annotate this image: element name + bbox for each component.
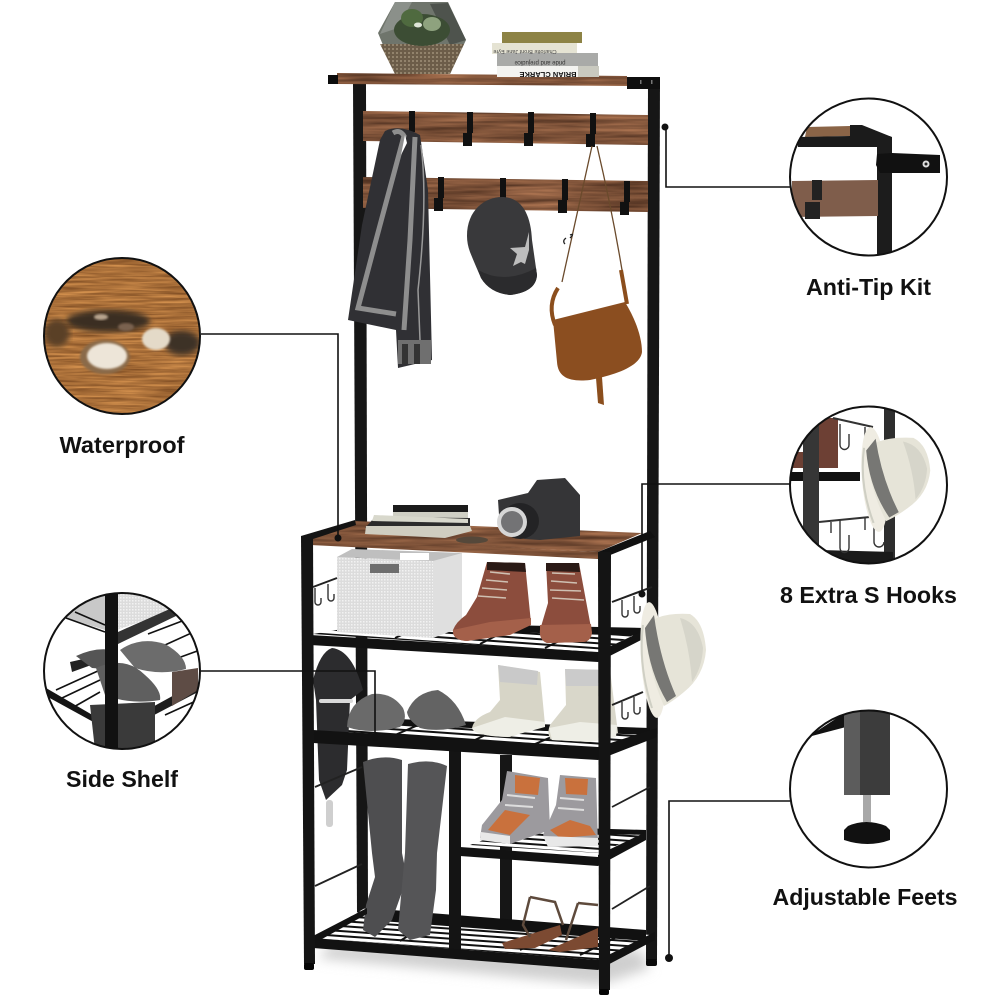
brown lace-up boots [453,562,592,643]
label: S hooks: 8 Extra S Hooks [780,582,957,608]
dot: waterproof [334,534,342,542]
dot: feet [665,954,673,962]
top wooden shelf [328,73,660,89]
product: hall tree rack with items [301,2,706,995]
callout: side shelf [44,590,378,792]
wooden hook rails [363,111,648,212]
stack of books: Charlotte Bront Jane Eyre [493,48,557,54]
shelf frame bars [310,630,657,970]
label: waterproof: Waterproof [60,432,185,458]
stack of books: pride and prejudice [514,59,566,65]
rear posts [353,78,660,966]
leader line: anti-tip [666,127,790,187]
tall grey boots [363,757,447,940]
camera [497,478,580,540]
folded umbrella [313,648,363,827]
front posts and feet [301,520,611,995]
scarf on hook [348,128,432,368]
circle outline: waterproof [44,258,200,414]
white high-top sneakers [472,665,618,742]
dot: S hooks [638,590,646,598]
photo: S hooks and hat [790,405,930,570]
floor shadow under the rack [318,945,650,985]
callout: waterproof [44,258,342,542]
white woven storage basket [337,549,462,638]
books and notebook on bench [365,505,488,544]
side rods and S hooks [313,578,652,909]
plant in geometric terrarium [378,2,466,74]
callout: 8 extra S hooks [638,405,957,608]
circle outline: feet [790,710,947,868]
leader line: side shelf [201,671,375,737]
stack of books: BRIAN CLARKE [519,70,577,79]
mid uprights [449,750,461,950]
label: anti-tip: Anti-Tip Kit [806,274,931,300]
callout: anti-tip kit [662,98,947,300]
brown thong sandals [502,897,598,952]
leader line: feet [669,801,790,958]
callout: adjustable feet [665,708,958,962]
label: side shelf: Side Shelf [66,766,178,792]
leader line: S hooks [642,484,790,594]
black coat hooks [405,111,630,215]
label: feet: Adjustable Feets [772,884,958,910]
photo: adjustable foot [808,708,890,844]
wooden bench shelf [310,521,655,560]
black baseball cap [467,197,537,295]
dot: anti-tip [662,124,668,130]
circle outline: S hooks [790,406,947,564]
shelf 3 mesh [470,826,646,853]
shelf 2 mesh [315,718,650,750]
photo: waterproof wood surface [44,258,200,414]
orange and grey sneakers [480,771,598,847]
leader line: waterproof [201,334,338,538]
photo: side shelf close-up [44,590,200,750]
white fedora hat on S hook [637,601,706,719]
grey slippers [347,690,466,731]
stack of books [492,32,599,79]
circle outline: anti-tip [790,98,947,256]
bottom shelf mesh [315,908,650,960]
shelf 1 mesh [313,622,645,653]
circle outline: side shelf [44,593,200,749]
dot: side shelf [372,734,378,740]
photo: anti-tip bracket [792,125,940,258]
brown shoulder bag with strap [552,146,642,405]
